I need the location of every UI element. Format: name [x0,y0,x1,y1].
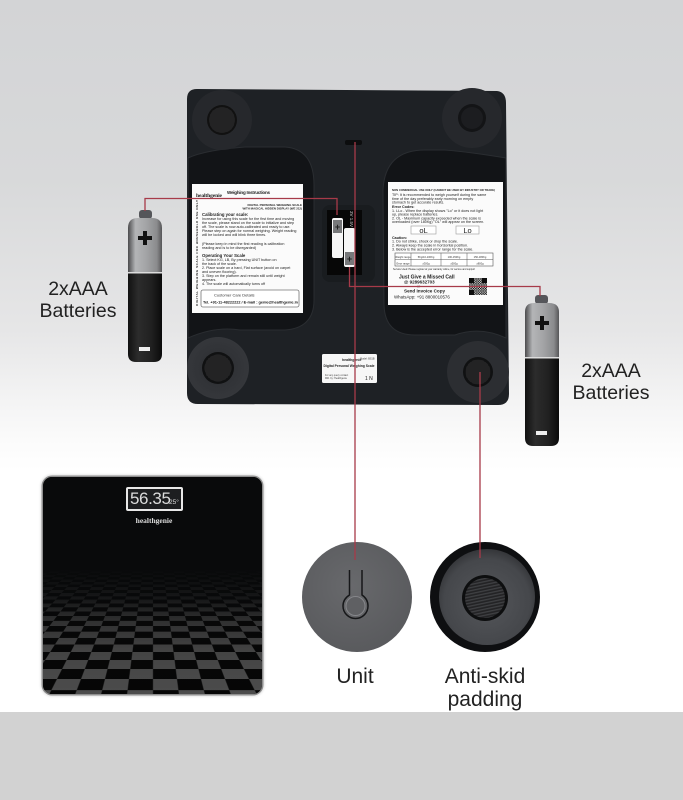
line: anti-skid foot [479,372,481,558]
instruction label: right: Service Used: Please register at your warranty online, for service and support [393,268,475,271]
instruction label: left: 1. Select KG, LB, By pressing UNIT button on [202,258,277,262]
brand: healthgenie [196,193,223,199]
error code: oL: oL [419,226,428,235]
bottom band [0,712,683,800]
battery cell: left: + [335,222,340,232]
caption: anti-skid padding: padding [448,688,522,711]
error range table: 100-150Kg [448,255,461,259]
instruction label: right: up, please replace batteries. [392,212,438,216]
model label: Model: BS1B [360,358,375,360]
instruction label: left [192,184,303,313]
minus sign [139,347,150,351]
minus sign [536,431,547,435]
battery cell: right: + [347,254,352,264]
battery: right [525,295,559,446]
left recess [188,147,314,338]
checkered floor [0,532,683,698]
instruction label: left: 3. Step on the platform and remain still until weight [202,274,285,278]
model label: For any query contact [325,374,348,377]
instruction label: right: or [417,284,421,288]
line: unit switch [354,142,356,560]
instruction label: left: 4. The scale will automatically turns off [202,282,266,286]
instruction label: right: 1. LLo - When the display shows "Lo" or it does not light [392,209,483,213]
error range table: ±300g [422,262,430,266]
error range table: Weight range [395,255,411,259]
instruction label: left: Operating Your Scale [202,253,246,258]
instruction label: right: Error Codes: [392,205,415,209]
instruction label: left: (Please keep in mind the first reading is calibration [202,242,284,246]
instruction label: left: Increase for using this scale for the first time and moving [202,217,294,221]
instruction label: right: Just Give a Missed Call [399,274,455,280]
instruction label: left: off. The scale is now auto-calibrated and ready to use. [202,225,290,229]
foot: bottom left [187,337,249,399]
scale base plate [187,89,509,405]
error range table: Error range [396,262,410,266]
instruction label: right: Caution: [392,236,407,240]
instruction label: left: WITH MAGICAL HIDDEN DISPLAY (WE 212) [242,206,302,210]
caption: left batteries: Batteries [40,300,117,322]
battery: left [128,210,162,362]
foot: top left [192,90,252,150]
line: left battery [145,198,337,215]
detail circle: anti-skid padding [430,542,540,652]
floor fade [43,477,262,694]
foot: bottom right [447,341,509,403]
error range table: 150-180Kg [474,255,487,259]
instruction label: right: 2. Always keep the scale in horizontal position. [392,244,468,248]
model label: healthgenie [342,358,362,362]
instruction label: right: TIP: It is recommended to weigh yourself during the same [392,193,486,197]
instruction label: right: 1. Do not strike, shock or drop the scale. [392,240,458,244]
instruction label: left: Calibrating your scale: [202,212,249,217]
instruction label: left: DIGITAL PERSONAL WEIGHING SCALE [248,203,302,207]
customer care box: Tel. +91-11-48222222 / E-mail : genie@healthgenie.in [203,300,299,304]
instruction label: right: 2. OL - Maximum capacity exceeded when the scale is [392,216,481,220]
instruction label: left: will be locked and will blink three times. [202,233,266,237]
instruction label: left: reading and is to be disregarded) [202,246,256,250]
caption: right batteries: 2xAAA [581,360,641,382]
LCD display: 25° [169,499,179,506]
caption: unit: Unit [336,665,374,688]
detail circle: unit [302,542,412,652]
product photo: scale top [43,477,262,694]
instruction label: right: overloaded (over 180Kg) "OL" will appear on the screen. [392,220,484,224]
instruction label: left: appears. [202,278,216,282]
instruction label: left: 2. Place scale on a hard, Flat surface (avoid on carpet [202,266,290,270]
model label: 1 N [365,376,373,382]
plus sign [138,231,152,245]
model label: Digital Personal Weighing Scale [324,364,375,368]
label heading: Weighing Instructions [227,190,270,195]
compartment marking: 3V 1.5V [349,211,354,227]
instruction label: left: the scale, please stand on the scale to initialize and step [202,221,294,225]
instruction label: right: time of the day preferably early morning on empty [392,197,473,201]
caption: left batteries: 2xAAA [48,278,108,300]
instruction label: right [388,182,503,305]
model label [322,354,377,383]
error range table: ±500g [450,262,458,266]
instruction label: left: Please step on again for normal weighing. Weight reading [202,229,296,233]
model label: Mfd. by: Healthgenie [325,377,348,380]
plus sign [535,316,549,330]
customer care box [201,290,299,307]
foot: top right [442,88,502,148]
LCD display: 56.35 [130,489,171,508]
unit switch slot [345,140,362,145]
error range table: 5Kg/10-100Kg [418,255,435,259]
line: right battery [350,267,540,296]
instruction label: left: DIGITAL WEIGHING SCALE FOR HOUSEHOLD USE ONLY [195,200,199,306]
error range table: ±800g [476,262,484,266]
right recess [383,150,506,338]
red callout lines [145,142,540,560]
instruction label: right: @ 9289632703 [404,280,435,284]
battery compartment [322,205,375,282]
error code: Lo: Lo [463,226,472,235]
QR code [469,278,487,295]
instruction label: right: NON COMMERCIAL USE ONLY (CANNOT BE USED BY INDUSTRY OR TRADE) [392,188,495,192]
caption: right batteries: Batteries [573,382,650,404]
instruction label: left: the back of the scale. [202,262,237,266]
brand logo: healthgenie [136,516,172,525]
instruction label: right: stomach to get accurate results. [392,200,444,204]
instruction label: left: and uneven flooring). [202,270,237,274]
instruction label: right: 3. Below is the accepted error range for the scale. [392,248,473,252]
caption: anti-skid padding: Anti-skid [445,665,525,688]
customer care box: Customer Care Details [214,292,254,298]
instruction label: right: WhatsApp: +91 8800010576 [394,294,450,300]
instruction label: right: Send Invoice Copy [404,288,446,294]
LCD display [126,487,183,511]
error range table [395,253,493,266]
